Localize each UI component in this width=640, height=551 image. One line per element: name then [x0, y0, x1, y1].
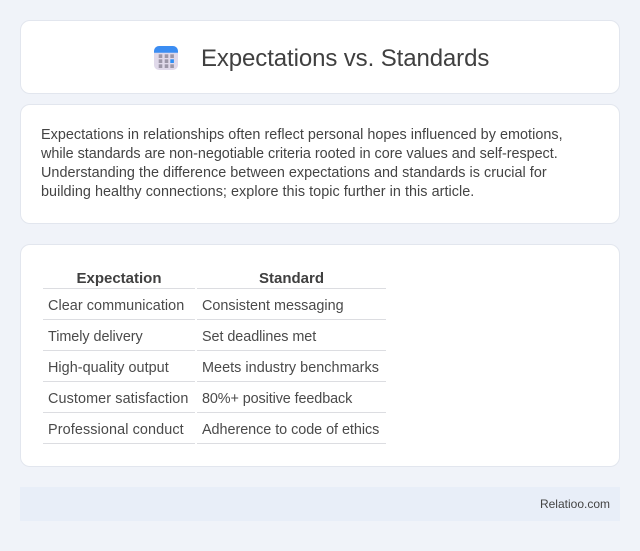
comparison table — [43, 270, 386, 444]
row 4 expectation: Customer satisfaction — [48, 391, 188, 407]
row 1 standard: Consistent messaging — [202, 298, 344, 314]
row 4 standard: 80%+ positive feedback — [202, 391, 352, 407]
row 2 expectation: Timely delivery — [48, 329, 143, 345]
intro panel — [20, 104, 620, 224]
intro text: building healthy connections; explore this topic further in this article. — [41, 184, 474, 200]
table panel — [20, 244, 620, 467]
table header: Expectation: Expectation — [76, 270, 162, 287]
row 5 expectation: Professional conduct — [48, 422, 184, 438]
intro text — [41, 127, 563, 200]
footer bar — [20, 487, 620, 521]
intro text: Understanding the difference between expectations and standards is crucial for — [41, 165, 547, 181]
table header: Standard: Standard — [259, 270, 324, 287]
row 3 expectation: High-quality output — [48, 360, 169, 376]
row 3 standard: Meets industry benchmarks — [202, 360, 379, 376]
row 1 expectation: Clear communication — [48, 298, 184, 314]
footer brand text: Relatioo.com — [540, 497, 610, 511]
title: Expectations vs. Standards — [201, 45, 489, 72]
intro text: Expectations in relationships often reflect personal hopes influenced by emotions, — [41, 127, 563, 143]
icon: calendar — [154, 46, 178, 70]
row 2 standard: Set deadlines met — [202, 329, 316, 345]
header panel — [20, 20, 620, 94]
intro text: while standards are non-negotiable criteria rooted in core values and self-respect. — [41, 146, 558, 162]
row 5 standard: Adherence to code of ethics — [202, 422, 379, 438]
